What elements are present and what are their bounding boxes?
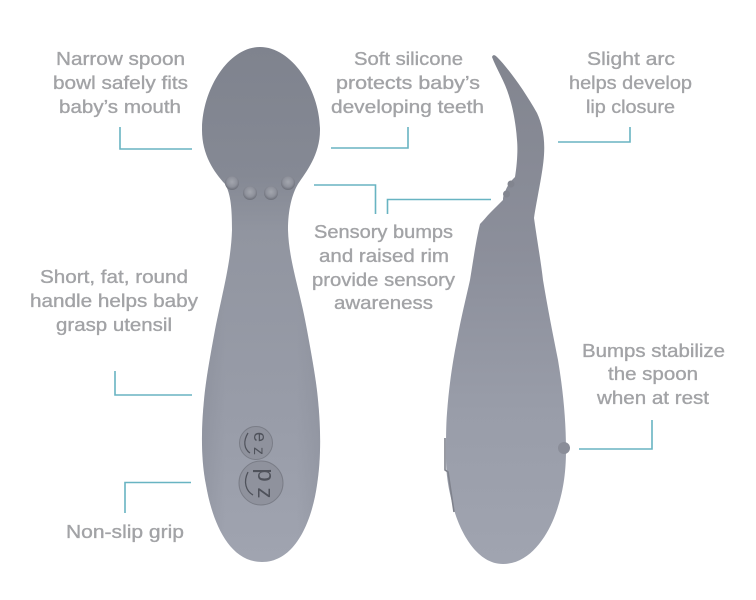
text: slight arc: Slight arc — [587, 48, 675, 69]
side view spoon — [445, 55, 570, 564]
text: slight arc: helps develop — [569, 72, 692, 93]
logo: ez: e — [250, 432, 270, 442]
text: soft silicone — [331, 48, 484, 117]
logo: pz: p — [252, 468, 279, 482]
leader line — [120, 127, 192, 149]
text: slight arc: lip closure — [586, 96, 675, 117]
text: short fat handle: Short, fat, round — [40, 266, 188, 287]
spoon body with bowl and handle — [202, 47, 320, 562]
text: sensory bumps: and raised rim — [319, 245, 449, 266]
text: slight arc — [569, 48, 692, 117]
text: soft silicone: Soft silicone — [354, 48, 463, 69]
text: narrow spoon bowl — [53, 48, 188, 117]
callout: sensory bumps — [312, 185, 491, 313]
logo: pz — [239, 461, 283, 505]
text: bumps stabilize — [582, 340, 725, 408]
logo: ez — [240, 426, 272, 460]
leader line — [125, 482, 191, 513]
leader line — [558, 127, 630, 142]
stabilizing bump — [558, 442, 570, 454]
callout: narrow spoon bowl — [53, 48, 192, 149]
text: bumps stabilize: when at rest — [596, 387, 709, 408]
leader line — [115, 371, 192, 395]
logo: pz: z — [253, 488, 278, 498]
leader line — [579, 420, 652, 449]
side logo raised edge — [445, 438, 454, 512]
text: sensory bumps — [312, 221, 456, 313]
side profile body — [446, 55, 566, 564]
leader line — [331, 127, 408, 148]
callout: slight arc — [558, 48, 692, 142]
text: sensory bumps: awareness — [334, 292, 433, 313]
text: soft silicone: protects baby’s — [336, 72, 480, 93]
text: short fat handle: handle helps baby — [30, 290, 199, 311]
text: non-slip grip: Non-slip grip — [66, 521, 184, 542]
text: narrow spoon bowl: Narrow spoon — [56, 48, 185, 69]
text: bumps stabilize: the spoon — [608, 363, 698, 384]
text: short fat handle — [30, 266, 199, 335]
callout: short fat handle — [30, 266, 199, 395]
text: sensory bumps: provide sensory — [312, 269, 456, 290]
callout: bumps stabilize — [579, 340, 725, 449]
spoon edge shading — [202, 230, 320, 562]
text: narrow spoon bowl: bowl safely fits — [53, 72, 188, 93]
logo: ez: z — [250, 447, 267, 455]
text: soft silicone: developing teeth — [331, 96, 484, 117]
text: short fat handle: grasp utensil — [56, 314, 172, 335]
callout: soft silicone — [331, 48, 484, 148]
callout: non-slip grip — [66, 482, 191, 542]
text: bumps stabilize: Bumps stabilize — [582, 340, 725, 361]
sensory bumps — [225, 176, 295, 200]
raised rim bumps — [503, 180, 514, 198]
front view spoon — [202, 47, 320, 562]
text: sensory bumps: Sensory bumps — [314, 221, 453, 242]
leader lines — [314, 185, 491, 214]
text: narrow spoon bowl: baby’s mouth — [59, 96, 181, 117]
